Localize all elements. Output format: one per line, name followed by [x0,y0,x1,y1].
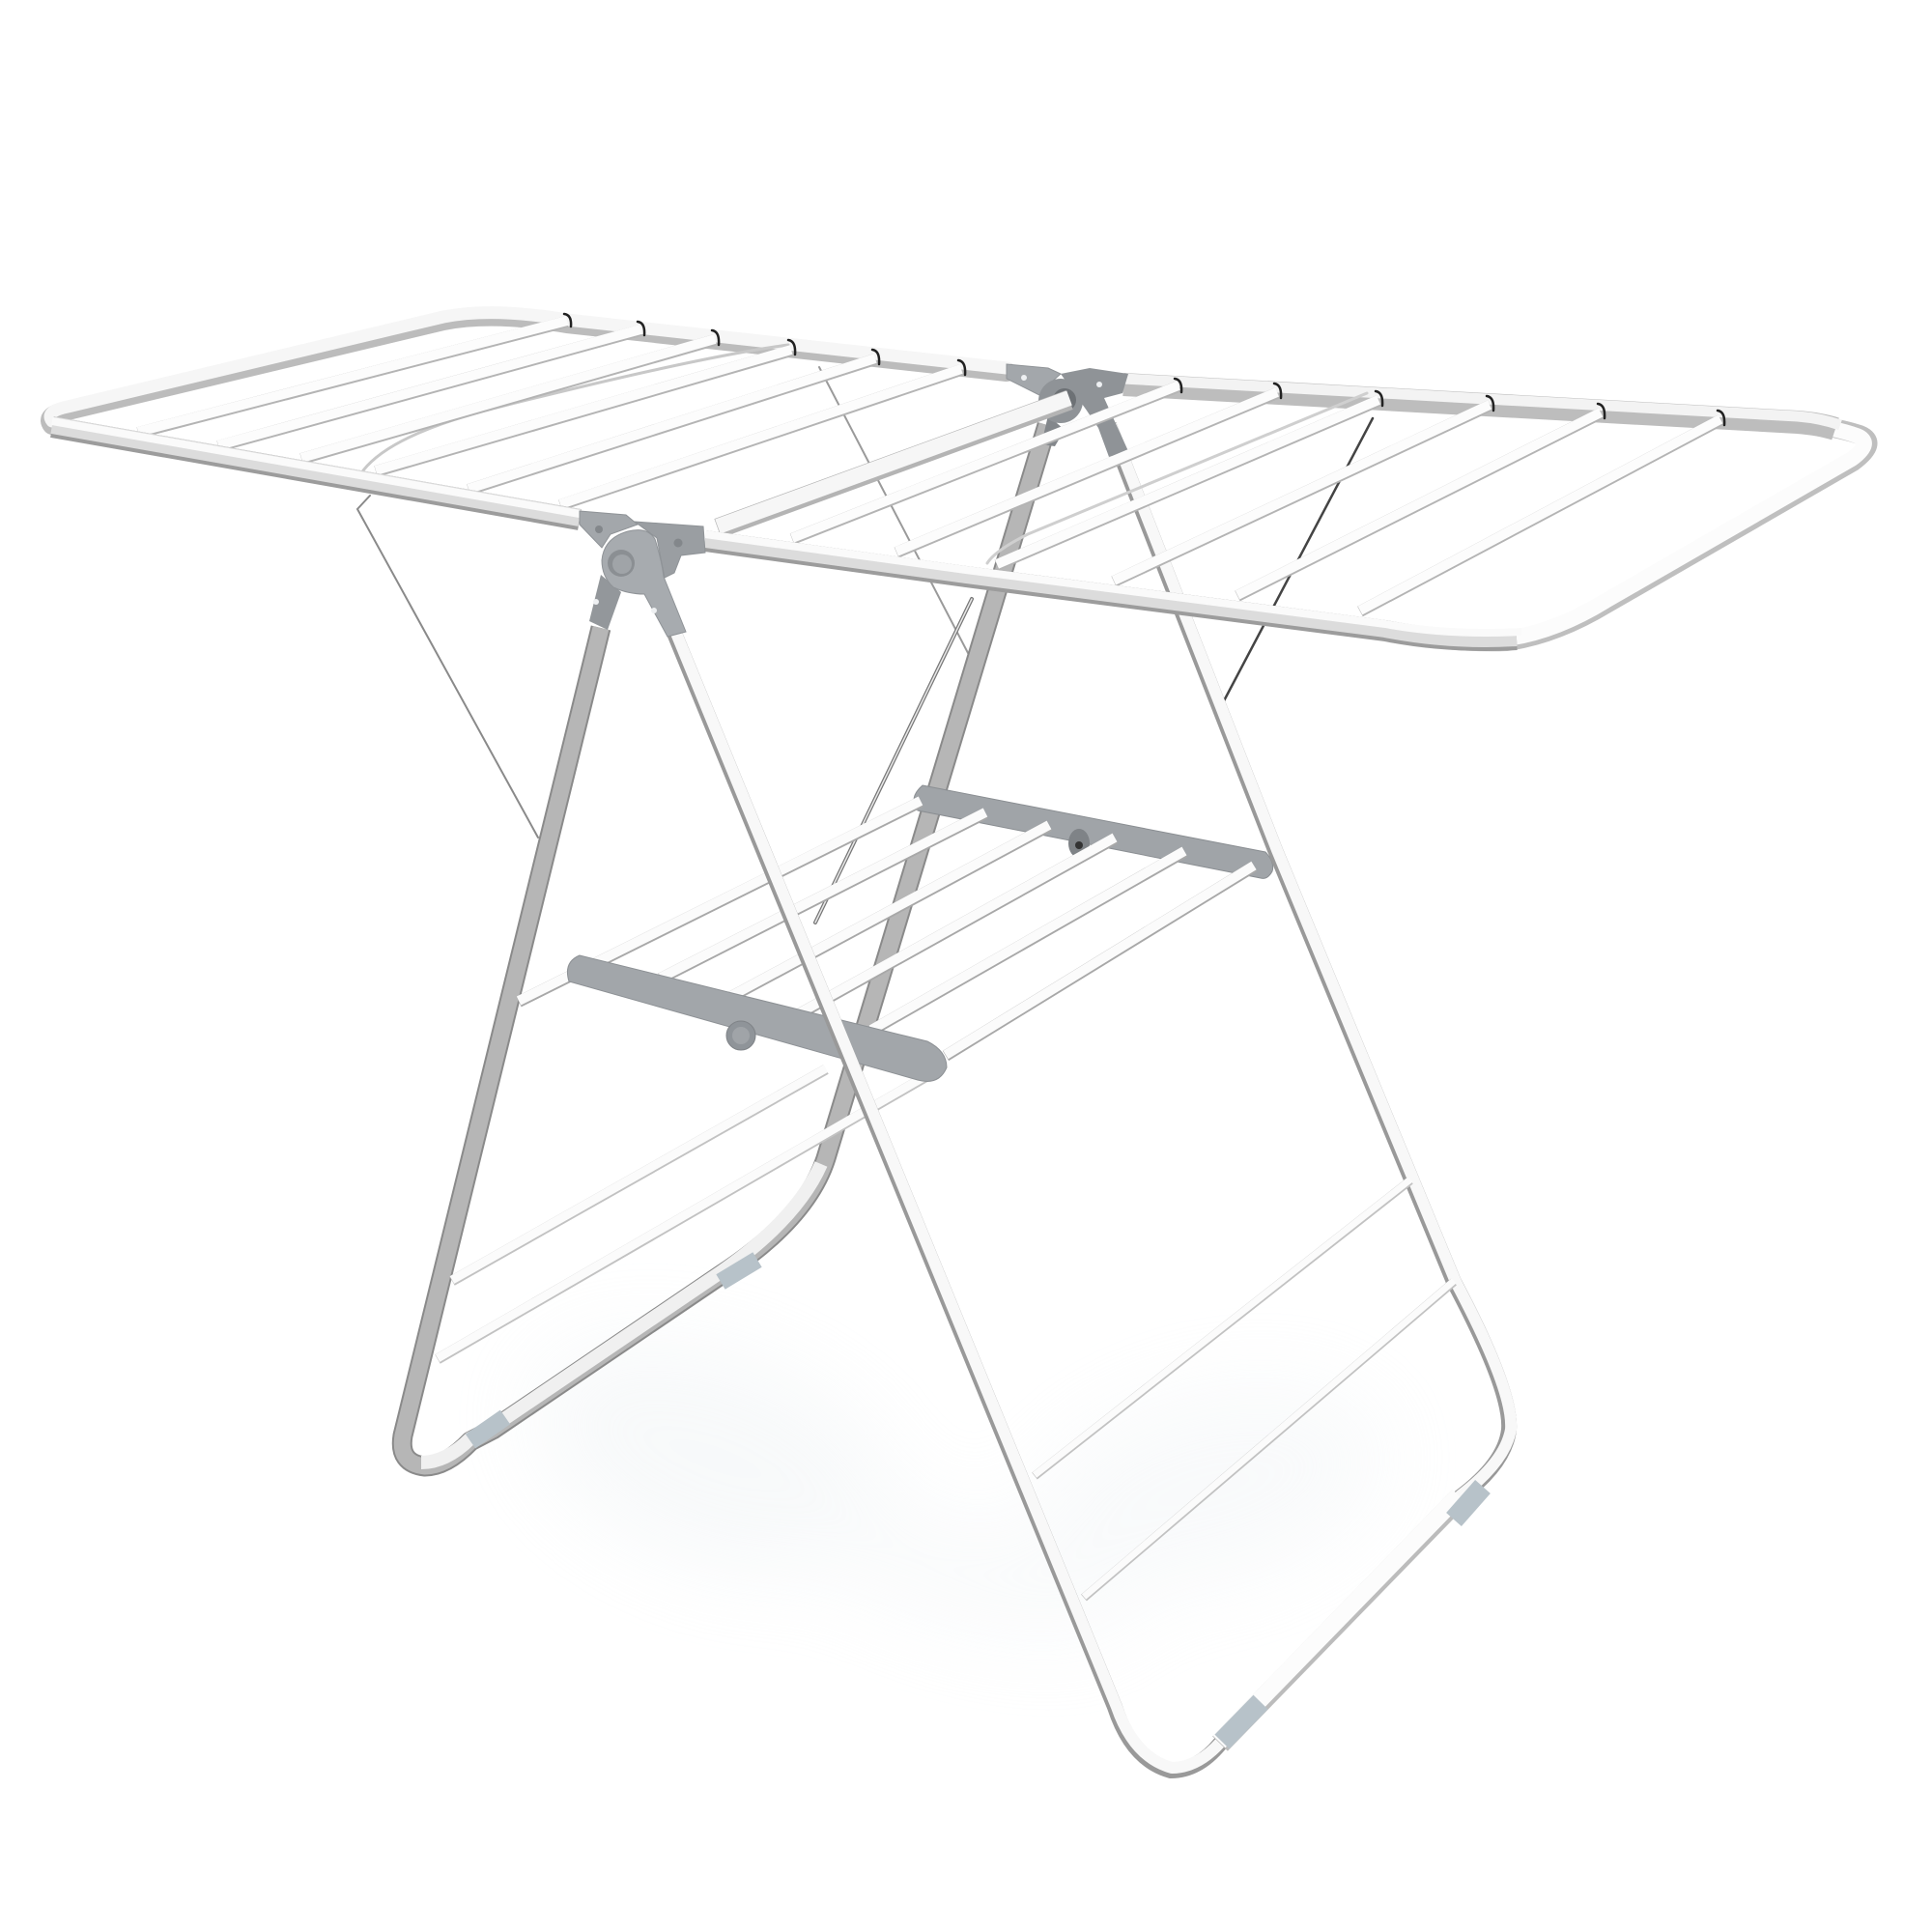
frame: back-left leg U-frame [402,425,1047,1466]
top rack frame: back-left end [50,313,1007,425]
feet: grey end caps [470,1260,1483,1742]
frame: front-right leg U-frame [673,425,1511,1771]
back hinge connector [1007,364,1128,457]
top rack frame: right curve and back rail [1123,379,1868,641]
front rail [52,421,1521,640]
lower rods on front frame [1035,1179,1454,1598]
floor shadow [497,1293,1409,1676]
front hinge connector [580,511,705,637]
back shelf bar [914,785,1273,878]
rod end clips on back rail [564,314,1724,425]
shelf rods [519,801,1254,1056]
top rack rods [138,321,1720,611]
support wires [357,367,1373,923]
front shelf bar [567,955,947,1081]
curved support wires [363,345,1367,563]
lower rods on back frame [438,1068,930,1359]
top rack central bar [718,398,1069,528]
